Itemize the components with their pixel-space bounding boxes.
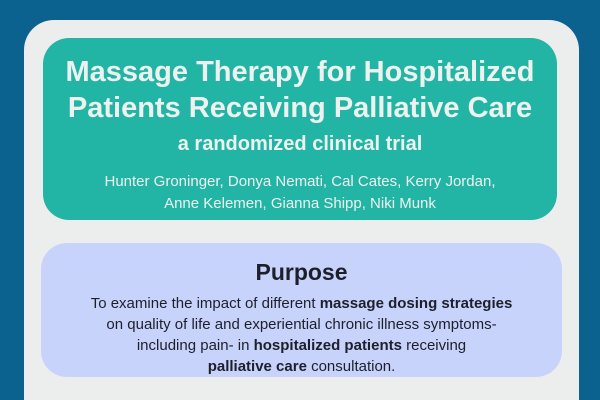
title: Massage Therapy for Hospitalized xyxy=(66,56,534,88)
authors: Hunter Groninger, Donya Nemati, Cal Cates, Kerry Jordan, xyxy=(104,173,496,190)
purpose text: To examine the impact of different massage dosing strategies xyxy=(91,295,512,312)
authors: Anne Kelemen, Gianna Shipp, Niki Munk xyxy=(164,195,436,212)
authors xyxy=(104,173,496,212)
title box xyxy=(43,38,557,220)
purpose heading: Purpose xyxy=(255,259,348,285)
subtitle: a randomized clinical trial xyxy=(178,133,422,155)
purpose text xyxy=(91,295,512,375)
title: Patients Receiving Palliative Care xyxy=(68,92,532,124)
title xyxy=(66,56,534,124)
purpose text: on quality of life and experiential chronic illness symptoms- xyxy=(106,316,497,333)
panel: purpose xyxy=(41,243,562,377)
purpose text: palliative care consultation. xyxy=(208,358,395,375)
purpose text: including pain- in hospitalized patients receiving xyxy=(137,337,466,354)
